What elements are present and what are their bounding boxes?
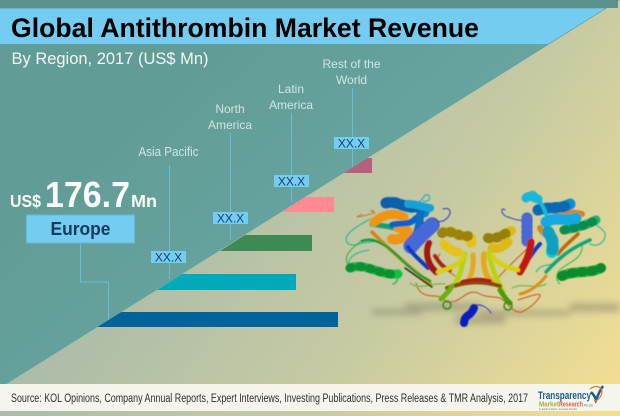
leader line: Latin America: [290, 113, 292, 202]
label: Latin America: Latin: [278, 82, 304, 96]
leader line: North America: [230, 133, 232, 240]
Europe label box: [26, 215, 134, 243]
leader line: Asia Pacific: [168, 165, 170, 279]
Europe value: [10, 174, 157, 215]
base strands: [447, 282, 500, 288]
logo: Transparency Market Research: Pvt. Ltd.: [584, 402, 593, 408]
bar: Asia Pacific: [157, 274, 296, 290]
Europe value: Mn: [131, 191, 157, 211]
orange helices: [374, 214, 404, 222]
title: Global Antithrombin Market Revenue: [11, 13, 479, 43]
Europe value: 176.7: [45, 174, 130, 215]
logo: Transparency Market Research: [538, 386, 603, 411]
value box: North America: XX.X: [217, 212, 244, 226]
label: North America: North: [215, 102, 245, 116]
logo: Transparency Market Research: Market: [539, 402, 560, 408]
footer band: [0, 384, 620, 411]
leader line: Europe: [80, 243, 108, 320]
thin loops: [346, 219, 378, 266]
subtitle: By Region, 2017 (US$ Mn): [12, 49, 208, 68]
yellow helices: [442, 232, 472, 243]
Europe label box: Europe: [50, 219, 110, 239]
molecule shadow: [372, 303, 620, 324]
logo: Transparency Market Research: In-depth Analysis. Accurate Results: [539, 407, 577, 411]
title band: [0, 8, 605, 44]
bar: North America: [220, 235, 312, 251]
bar: Europe: [96, 312, 338, 327]
long sheet strands: [372, 232, 430, 283]
bar: Rest of the World: [343, 158, 372, 173]
label: Rest of the World: Rest of the: [322, 57, 381, 71]
dark blue helices: [411, 225, 432, 246]
bar: Latin America: [282, 197, 334, 212]
value box: Asia Pacific: XX.X: [155, 250, 182, 264]
green helices: [350, 266, 398, 274]
icon: protein molecule: [346, 191, 605, 323]
label: North America: America: [208, 118, 252, 132]
blue-cyan helices right: [526, 196, 538, 199]
value box: Rest of the World: XX.X: [338, 136, 365, 150]
Europe value: US$: [10, 191, 41, 211]
label: Latin America: America: [269, 98, 313, 112]
top strip: [0, 0, 618, 8]
bottom blue helix: [464, 308, 474, 323]
label: Asia Pacific: Asia Pacific: [138, 145, 198, 159]
label: Rest of the World: World: [336, 73, 367, 87]
logo: Transparency Market Research: Research: [559, 402, 583, 408]
leader line: Rest of the World: [352, 88, 354, 167]
logo: Transparency Market Research: Transparency: [538, 390, 592, 402]
blue-cyan helices left: [386, 202, 424, 212]
value box: Latin America: XX.X: [278, 174, 305, 188]
central sheets: [427, 243, 436, 272]
